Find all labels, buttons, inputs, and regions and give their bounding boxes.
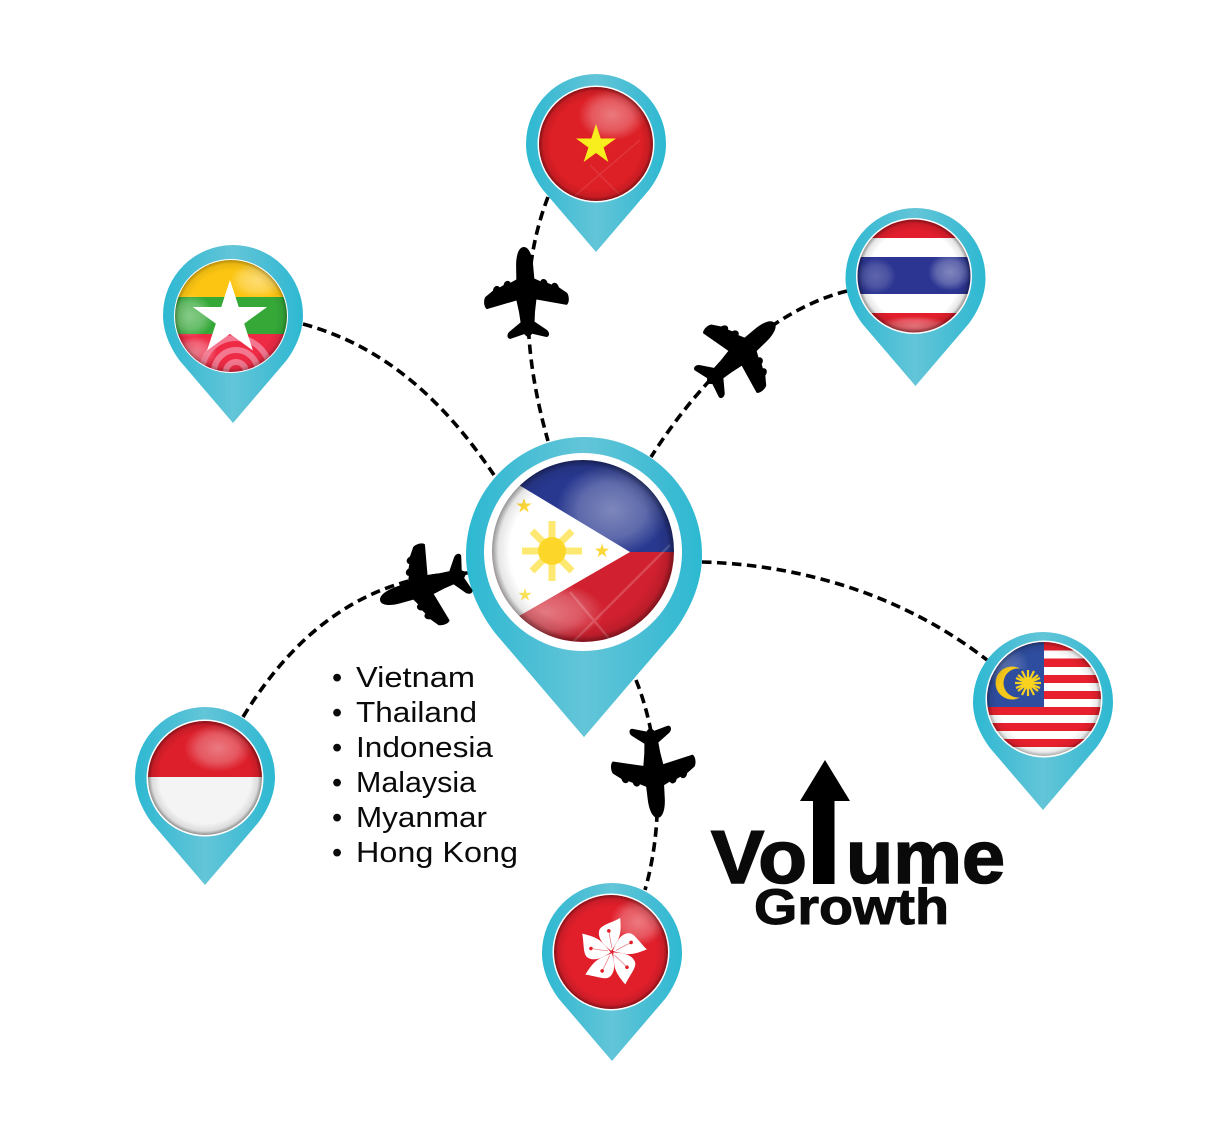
bauhinia flower <box>582 918 647 984</box>
flag: Indonesia <box>148 721 262 835</box>
volume word: Vo <box>711 815 807 899</box>
flag: Thailand <box>858 220 970 332</box>
destination list: • <box>332 767 342 799</box>
pin: Hong Kong <box>542 883 682 1061</box>
plane to Indonesia <box>367 532 480 641</box>
destination list <box>332 662 518 869</box>
destination list: Indonesia <box>356 732 494 764</box>
destination list: Myanmar <box>356 802 487 834</box>
pin: Vietnam <box>526 74 666 252</box>
destination list: Thailand <box>356 697 477 729</box>
destination list: Hong Kong <box>356 837 518 869</box>
dashed route lines <box>243 197 987 890</box>
destination list: Vietnam <box>356 662 475 694</box>
pin: Indonesia <box>135 707 275 885</box>
plane to Hong Kong <box>608 723 700 822</box>
pin: Myanmar <box>163 245 303 423</box>
destination list: • <box>332 697 342 729</box>
growth word: Growth <box>754 879 949 935</box>
flag: Philippines <box>492 460 674 642</box>
pin: Malaysia <box>973 632 1113 810</box>
plane to Vietnam <box>481 245 571 340</box>
flag: Hong Kong <box>554 895 668 1009</box>
arrow: upward <box>800 760 850 884</box>
pin: Philippines (centre) <box>466 437 702 737</box>
pin: Thailand <box>846 208 986 386</box>
flag: Malaysia <box>987 642 1101 756</box>
volume word <box>711 815 1005 899</box>
destination list: • <box>332 732 342 764</box>
volume word: l <box>815 815 836 899</box>
volume word: ume <box>846 815 1005 899</box>
flag: Myanmar <box>175 260 287 372</box>
plane to Thailand <box>678 291 803 415</box>
destination list: • <box>332 802 342 834</box>
destination list: Malaysia <box>356 767 477 799</box>
destination list: • <box>332 662 342 694</box>
destination list: • <box>332 837 342 869</box>
flag: Vietnam <box>539 87 653 201</box>
volume growth label <box>711 760 1005 935</box>
